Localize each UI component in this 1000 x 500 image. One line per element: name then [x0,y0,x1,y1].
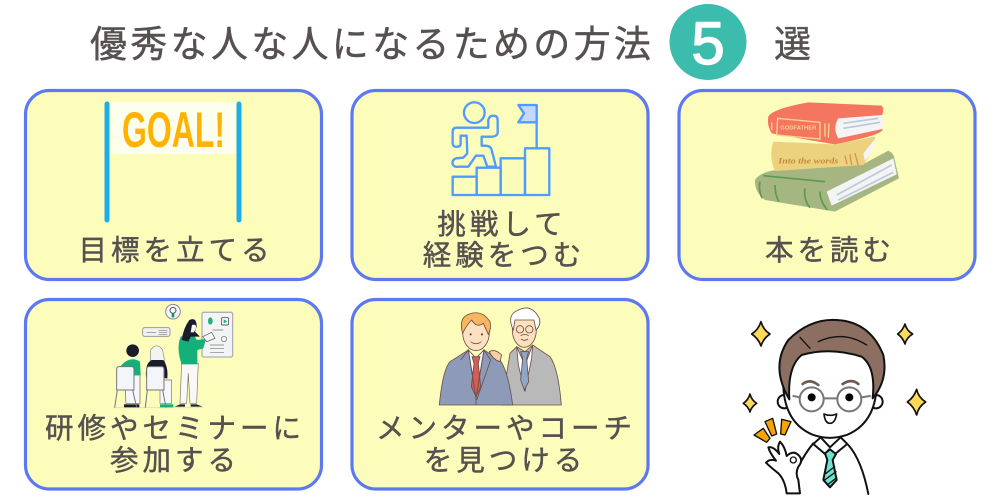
panel: find a mentor or coach: を見つける [424,445,586,477]
label: 目標を立てる [78,235,274,267]
panel: attend seminars: 参加する [110,445,240,477]
icon: goal banner: GOAL! [122,102,225,158]
number badge: 5: 5 [691,10,725,77]
sparkles [743,322,926,415]
icon: goal banner [107,102,239,220]
collar and tie [813,437,847,454]
panel: read books [679,90,975,280]
title [90,4,811,80]
panel: find a mentor or coach [352,300,648,489]
emphasis marks [754,418,791,442]
panel: attend seminars [26,300,322,489]
illustration: seminar presenter and audience [113,304,233,408]
OK hand [766,442,801,493]
title: 選 [774,24,811,65]
panel: set goals [26,90,322,280]
label: 研修やセミナーに [45,413,305,445]
number badge: 5 [670,4,746,80]
icon: stack of books: Into the words [777,156,838,165]
label: 本を読む [765,235,895,267]
illustration: young man and senior mentor [439,308,561,405]
icon: climbing stairs to flag [452,102,549,195]
label: 挑戦して [437,209,567,241]
panel: take on challenges: 経験をつむ [423,240,585,272]
body and head [798,443,868,494]
icon: stack of books: GODFATHER [780,125,816,131]
title: 優秀な人な人になるための方法 [90,24,654,65]
icon: stack of books [755,102,899,212]
label: メンターやコーチ [376,413,636,445]
panel: take on challenges [352,90,648,280]
illustration: man with glasses giving OK sign [743,320,926,494]
